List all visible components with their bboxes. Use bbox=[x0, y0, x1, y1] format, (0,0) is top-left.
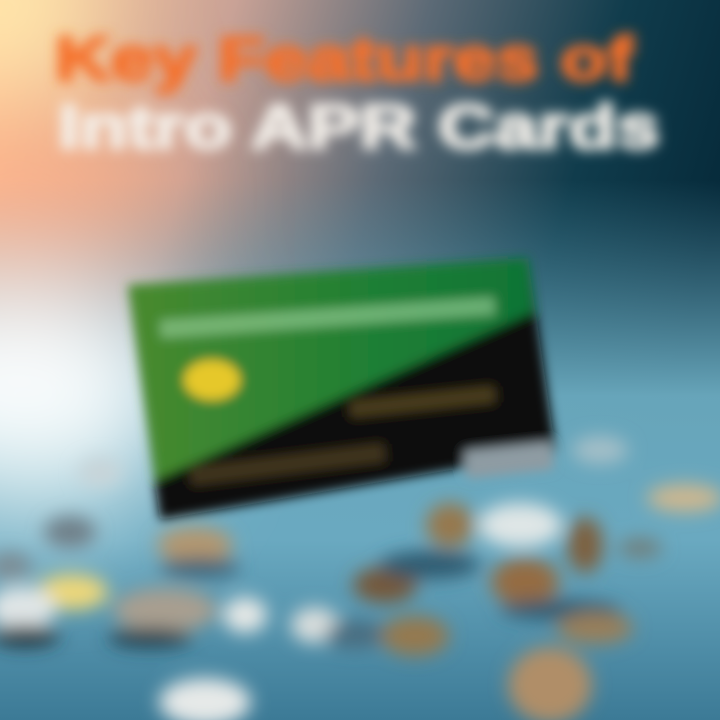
coin bbox=[500, 600, 620, 620]
coin bbox=[618, 538, 662, 558]
card name text bbox=[160, 297, 495, 338]
coin bbox=[108, 628, 192, 648]
coin bbox=[0, 586, 56, 630]
credit card bbox=[128, 258, 556, 520]
card logo bbox=[464, 442, 554, 479]
coin bbox=[572, 436, 628, 464]
card body bbox=[128, 258, 556, 520]
title bbox=[55, 25, 660, 162]
coin bbox=[381, 616, 449, 656]
coin bbox=[223, 597, 267, 633]
coin bbox=[567, 517, 603, 573]
card gold name bbox=[190, 443, 385, 485]
card chip bbox=[184, 360, 240, 400]
coin bbox=[157, 527, 233, 563]
coin bbox=[478, 503, 562, 547]
card gold number bbox=[350, 386, 495, 417]
coin bbox=[159, 678, 251, 720]
coin bbox=[113, 588, 217, 632]
coin bbox=[353, 567, 417, 603]
coin bbox=[0, 625, 59, 647]
coin bbox=[78, 458, 122, 486]
card green face bbox=[128, 258, 533, 480]
coin bbox=[291, 607, 339, 643]
coin bbox=[0, 552, 32, 580]
coin bbox=[380, 551, 480, 579]
coin bbox=[508, 647, 592, 720]
coin bbox=[491, 558, 559, 606]
coin bbox=[647, 484, 720, 512]
coin bbox=[36, 574, 108, 610]
coin bbox=[426, 503, 474, 547]
coin bbox=[557, 612, 633, 644]
title line 1: Key Features of bbox=[55, 25, 633, 94]
coin bbox=[160, 558, 240, 578]
title line 2: Intro APR Cards bbox=[58, 93, 660, 162]
coin bbox=[325, 621, 385, 649]
scattered coins bbox=[0, 436, 720, 720]
coin bbox=[44, 516, 96, 548]
